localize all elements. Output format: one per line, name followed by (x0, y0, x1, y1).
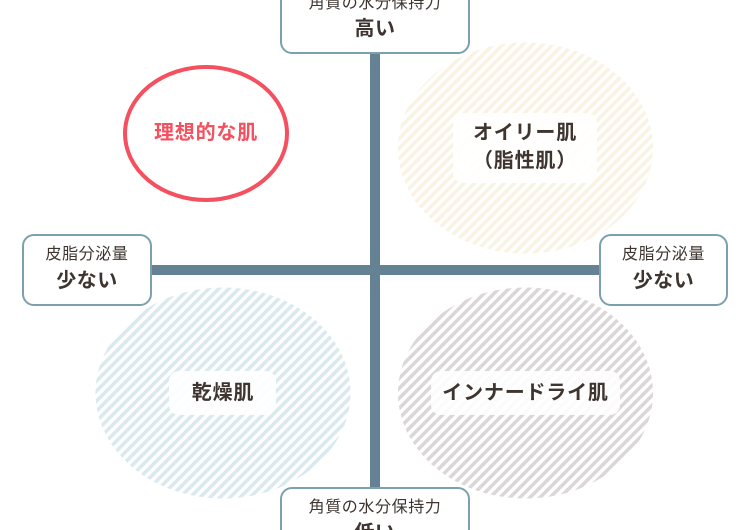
dry skin bubble: 乾燥肌 (192, 381, 254, 404)
left label: low sebum: 少ない (56, 269, 118, 292)
bottom label: low moisture (281, 488, 469, 530)
horizontal axis (149, 265, 602, 275)
top label: high moisture (281, 0, 469, 53)
vertical axis (370, 50, 380, 490)
inner dry skin bubble: インナードライ肌 (442, 382, 609, 404)
bottom label: low moisture: 角質の水分保持力 (309, 498, 441, 516)
oily skin bubble (398, 42, 653, 254)
ideal skin oval (125, 67, 287, 200)
right label: sebum: 少ない (633, 269, 694, 292)
right label: sebum: 皮脂分泌量 (622, 245, 705, 263)
left label: low sebum: 皮脂分泌量 (45, 245, 129, 263)
left label: low sebum (23, 235, 151, 305)
oily skin bubble: オイリー肌 (473, 122, 577, 144)
dry skin bubble (96, 288, 350, 498)
oily skin bubble: （脂性肌） (473, 149, 577, 172)
ideal skin oval: 理想的な肌 (154, 121, 258, 144)
top label: high moisture: 高い (354, 17, 396, 40)
right label: sebum (600, 235, 727, 305)
inner dry skin bubble (398, 288, 653, 498)
